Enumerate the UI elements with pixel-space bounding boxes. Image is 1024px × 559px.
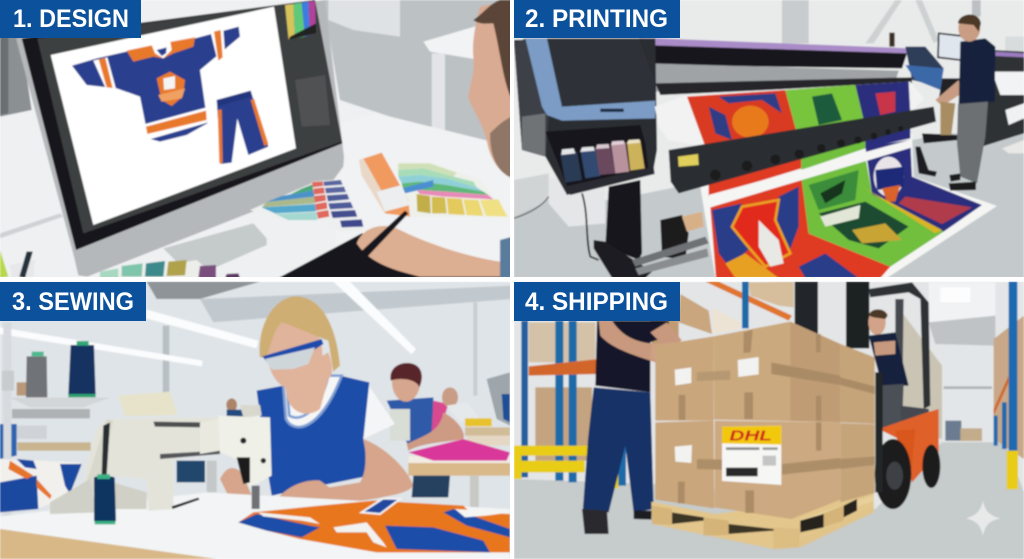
printed banner on floor [700,123,997,278]
designer head [468,0,512,278]
pens in holder [0,250,35,278]
sewing table [0,492,510,559]
palette cards on desk [97,260,240,278]
swatch book [359,153,410,217]
step label: shipping [514,282,680,321]
shorts design [217,91,268,164]
panel: shipping [514,282,1024,559]
panel: sewing [0,282,512,559]
orange and blue jersey on table [238,498,510,552]
media roll and printed sheet [655,82,924,147]
step label: sewing [0,282,146,321]
jersey design [72,27,240,142]
main sewer [220,296,413,510]
second printer [922,50,1024,153]
DHL shipping label [722,426,781,485]
operator monitor [938,33,968,61]
worker [582,321,682,534]
shipping labels [675,367,691,385]
printer body [514,38,657,195]
color picker [285,1,316,40]
right rack [994,282,1024,489]
design office background [0,0,512,278]
DHL shipping label: DHL [729,428,772,444]
warehouse background [514,282,1024,559]
background worker table and worker [387,363,510,509]
left racks with cartons [521,282,794,486]
cartons [655,322,875,519]
factory background [512,0,1024,278]
color fan left [250,179,363,232]
yellow safety rail [514,446,618,488]
forklift [795,282,940,509]
sewing hall background [0,282,512,559]
step label: design: 1. DESIGN [13,5,129,33]
step label: printing [514,0,680,38]
roller bar [669,107,936,193]
ink bottles [560,139,645,183]
panel: design [0,0,512,278]
monitor stand [163,223,267,268]
step label: printing: 2. PRINTING [525,5,668,33]
step label: sewing: 3. SEWING [12,288,134,316]
step label: design [0,0,141,38]
monitor [16,0,344,277]
printer stand [514,147,937,278]
color fan right [397,163,508,217]
printer operator [935,15,995,191]
ceiling lights [0,282,416,366]
canvas [51,7,296,225]
signal tower [889,33,895,47]
far worker [226,398,243,418]
packing tape [771,362,840,385]
sewing machine [50,392,272,524]
printer carriage and rails [639,38,944,95]
watermark sparkle [966,501,1000,536]
banner artwork [712,203,752,267]
designer hand and stylus [347,211,500,277]
thread stand [2,322,110,517]
pallet [651,493,874,549]
pen tablet [278,233,500,278]
panel: printing [512,0,1024,278]
step label: shipping: 4. SHIPPING [525,288,668,316]
stack of jerseys on left [0,459,82,512]
